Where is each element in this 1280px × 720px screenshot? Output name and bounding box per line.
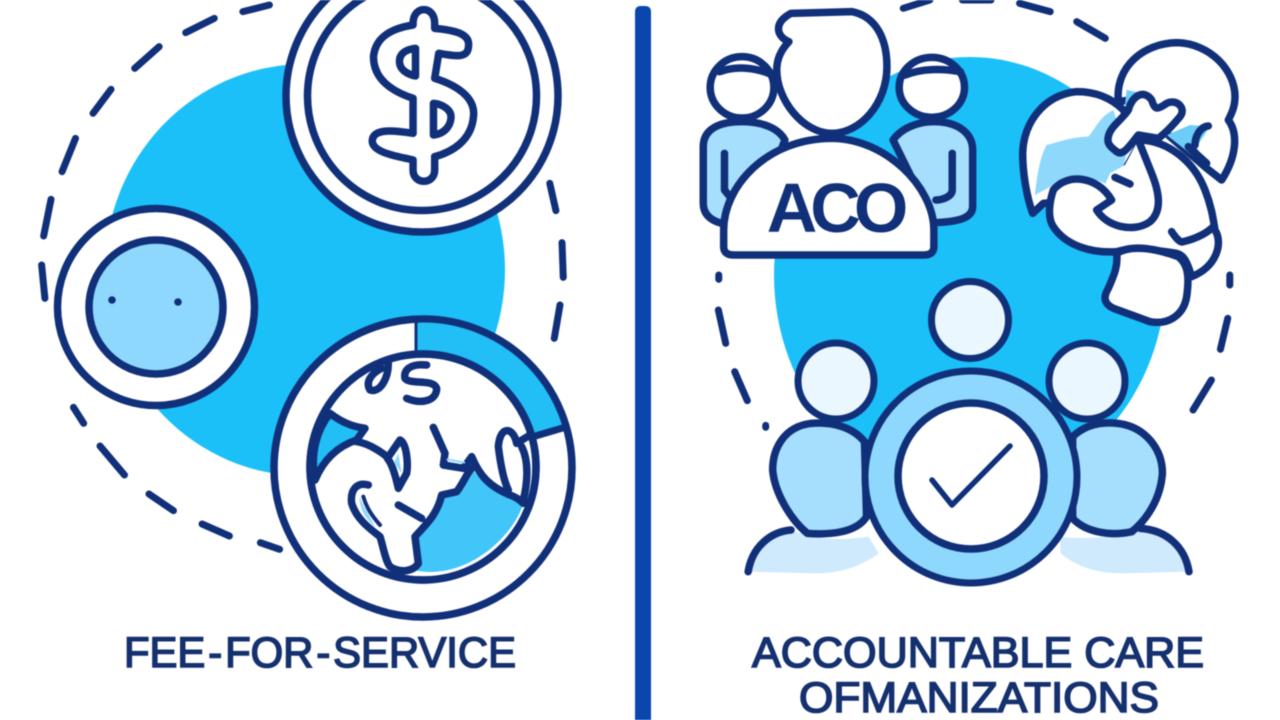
panel: fee-for-service [42,0,572,677]
icon: people with check badge [748,282,1189,583]
desk [724,138,934,255]
icon: globe [274,319,572,617]
side bodies [773,423,867,534]
icon: handshake shape [1023,43,1235,322]
dashed orbit left [42,5,563,549]
background blue blob left [105,64,505,476]
icon: face circle [58,208,254,406]
side people [703,57,973,223]
ring blue sector [416,319,566,437]
continents [313,363,530,572]
dashed orbit right [718,0,1230,427]
central divider [635,6,651,720]
dollar sign [372,10,474,181]
center person head [777,12,887,133]
icon: dollar coin [286,0,558,232]
panel: accountable care organizations [703,0,1235,720]
heading: fee-for-service: FEE-FOR-SERVICE [124,629,516,677]
heading: accountable care organizations [752,629,1204,720]
ACO desk label: ACO [767,169,906,247]
lower shoulders [748,528,1189,573]
heading: accountable care organizations: ACCOUNTABLE CARE [752,629,1204,677]
background blue blob right [774,57,1166,493]
heads [798,282,1125,419]
icon: ACO team [703,12,973,255]
check badge [865,371,1077,583]
